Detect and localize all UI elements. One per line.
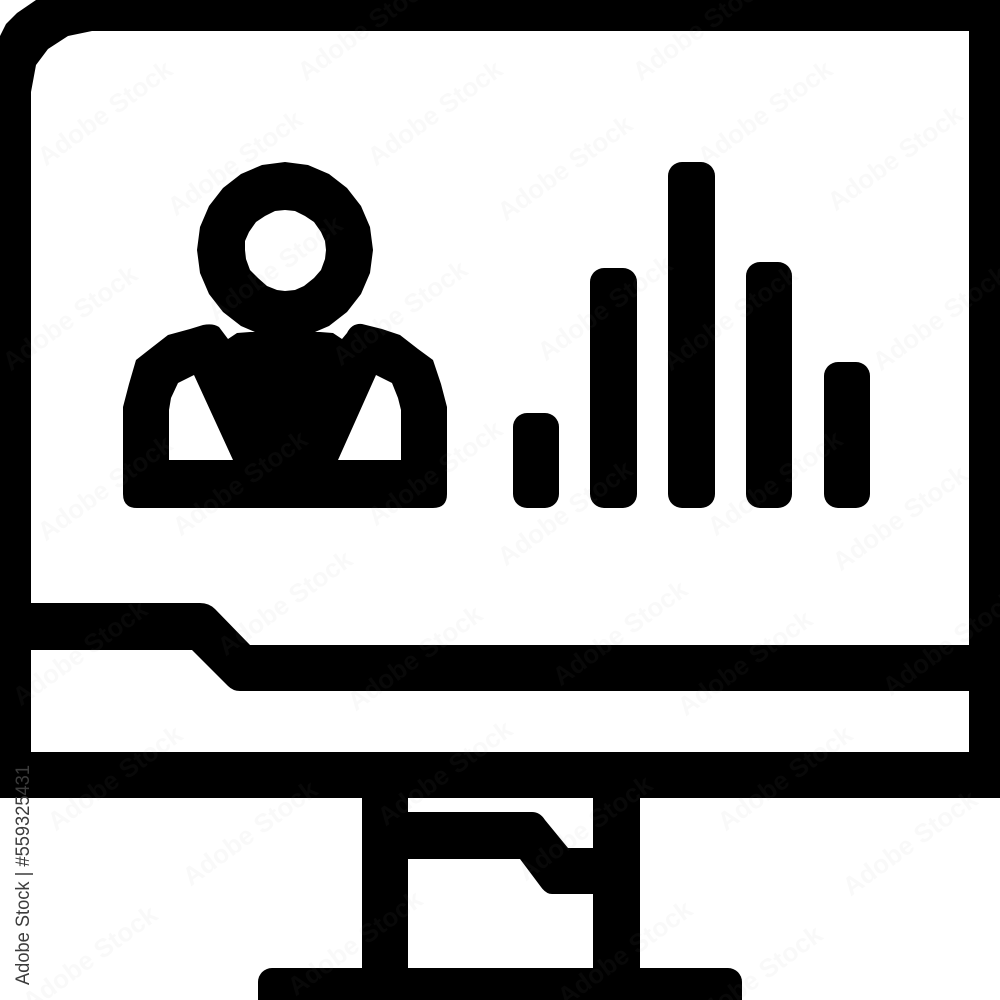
stock watermark pattern: Adobe Stock [32, 54, 178, 172]
bar 3 [668, 162, 715, 508]
stock watermark pattern: Adobe Stock [202, 209, 348, 327]
stand highlight band [408, 812, 593, 894]
stock watermark pattern: Adobe Stock [692, 54, 838, 172]
icon: person [123, 162, 447, 508]
stock watermark pattern: Adobe Stock [372, 714, 518, 832]
stock watermark pattern: Adobe Stock [712, 719, 858, 837]
stock watermark pattern: Adobe Stock [827, 459, 973, 577]
stock watermark pattern: Adobe Stock [362, 54, 508, 172]
person torso [123, 324, 447, 508]
stand left post [362, 790, 408, 980]
stock watermark pattern: Adobe Stock [212, 544, 358, 662]
stock watermark pattern: Adobe Stock [492, 109, 638, 227]
monitor lower bezel pane [31, 650, 969, 752]
bar 2 [590, 268, 637, 508]
stock watermark pattern: Adobe Stock [342, 599, 488, 717]
stock watermark pattern: Adobe Stock [167, 424, 313, 542]
bar chart [513, 162, 870, 508]
stock watermark pattern: Adobe Stock [162, 104, 308, 222]
stock watermark pattern: Adobe Stock [532, 249, 678, 367]
monitor frame [0, 0, 1000, 798]
stock watermark pattern: Adobe Stock [672, 604, 818, 722]
stock watermark pattern: Adobe Stock [362, 414, 508, 532]
stock watermark pattern: Adobe Stock [282, 884, 428, 1000]
stock watermark pattern: Adobe Stock [327, 254, 473, 372]
stock watermark pattern: Adobe Stock [42, 719, 188, 837]
stock watermark pattern: Adobe Stock [547, 574, 693, 692]
stock watermark pattern: Adobe Stock [657, 259, 803, 377]
stock watermark pattern: Adobe Stock [177, 774, 323, 892]
stock watermark pattern: Adobe Stock [7, 594, 153, 712]
stock watermark pattern: Adobe Stock [32, 429, 178, 547]
monitor screen pane [31, 31, 969, 645]
stock watermark pattern: Adobe Stock [492, 454, 638, 572]
stand base [258, 968, 742, 1000]
bar 5 [824, 362, 870, 508]
stand right post [593, 790, 640, 980]
stock watermark pattern: Adobe Stock [702, 424, 848, 542]
stock watermark pattern: Adobe Stock [837, 784, 983, 902]
stock watermark pattern: Adobe Stock [0, 259, 143, 377]
monitor stand [258, 790, 742, 1000]
stock watermark pattern: Adobe Stock [512, 769, 658, 887]
bar 4 [746, 262, 792, 508]
stock watermark pattern: Adobe Stock [822, 99, 968, 217]
stock id caption: Adobe Stock | #559325431 [12, 765, 34, 985]
bar 1 [513, 413, 559, 508]
person head ring [197, 162, 373, 338]
